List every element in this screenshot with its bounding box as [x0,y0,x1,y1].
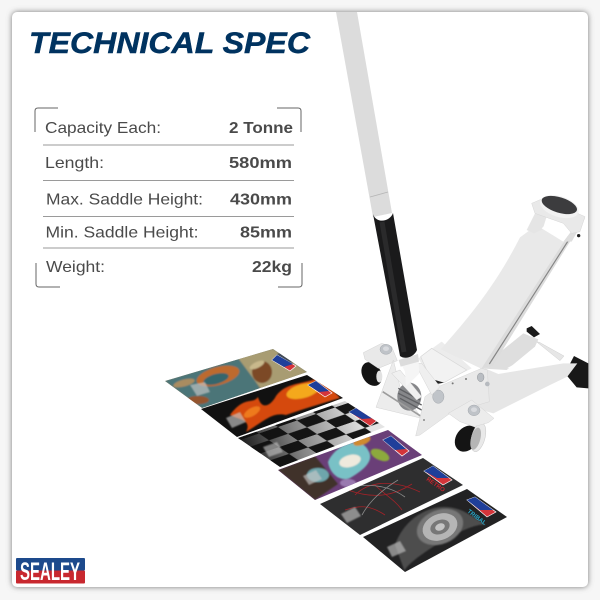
badge [308,381,332,397]
row: length: Length: [45,155,104,172]
right side plate [416,368,489,436]
row: max saddle height: 430mm [230,192,292,208]
row dividers [43,145,294,248]
lower arm [447,363,577,413]
front wheel [450,421,489,456]
range name: TRIBAL [466,509,487,527]
mat: retro pinstripe [320,458,463,535]
pump coil [397,383,422,411]
row: max saddle height: Max. Saddle Height: [46,192,203,208]
row: length [45,155,292,172]
rear wheel [565,356,588,388]
far rear wheel [527,326,540,337]
illustration: trolley jack [336,12,588,456]
mat: chequered flag [238,401,385,467]
row: capacity: Capacity Each: [45,120,161,137]
jack body [357,191,588,456]
illustration: printed mats [165,349,507,572]
row: weight: Weight: [46,259,105,276]
range name: RETRO [425,477,446,494]
rear arm shadow [480,333,538,370]
pump mechanism [392,354,440,400]
logo: Sealey: SEALEY [20,558,80,586]
badge [467,497,496,517]
row: max saddle height [46,192,292,208]
badge [272,355,296,371]
mat: tribal wheel [363,489,507,572]
small logo block [190,382,210,396]
row: min saddle height: Min. Saddle Height: [46,224,199,242]
row: length: 580mm [229,155,292,172]
bracket frame [35,108,302,287]
small logo block [341,507,361,523]
row: capacity: 2 Tonne [229,120,293,137]
mat: dragon [165,349,307,408]
rear axle [536,341,564,361]
mat: cartoon monster [278,430,422,500]
mat: flames [201,375,343,437]
lifting arm side rail [482,237,573,368]
pivot bolts [423,373,490,421]
left foot plate [363,343,397,368]
spec table [35,108,302,287]
tray [418,342,472,387]
small logo block [303,470,322,485]
guide rod [383,392,422,417]
jack handle [336,12,417,358]
title: TECHNICAL SPEC [29,27,311,60]
front foot plate [448,400,494,427]
rear gap [507,355,557,368]
badge [424,466,452,485]
left side plate [376,360,422,418]
row: weight: 22kg [252,259,292,276]
row: min saddle height [46,224,292,242]
small logo block [387,541,406,557]
left wheel [357,358,386,390]
small logo block [263,442,283,457]
row: weight [46,259,292,276]
badge [383,436,409,456]
logo: Sealey [16,558,85,586]
badge [349,407,378,426]
small logo block [226,412,246,428]
row: min saddle height: 85mm [240,224,292,242]
saddle [527,191,585,242]
lifting arm top plate [441,227,570,368]
row: capacity [45,120,293,137]
